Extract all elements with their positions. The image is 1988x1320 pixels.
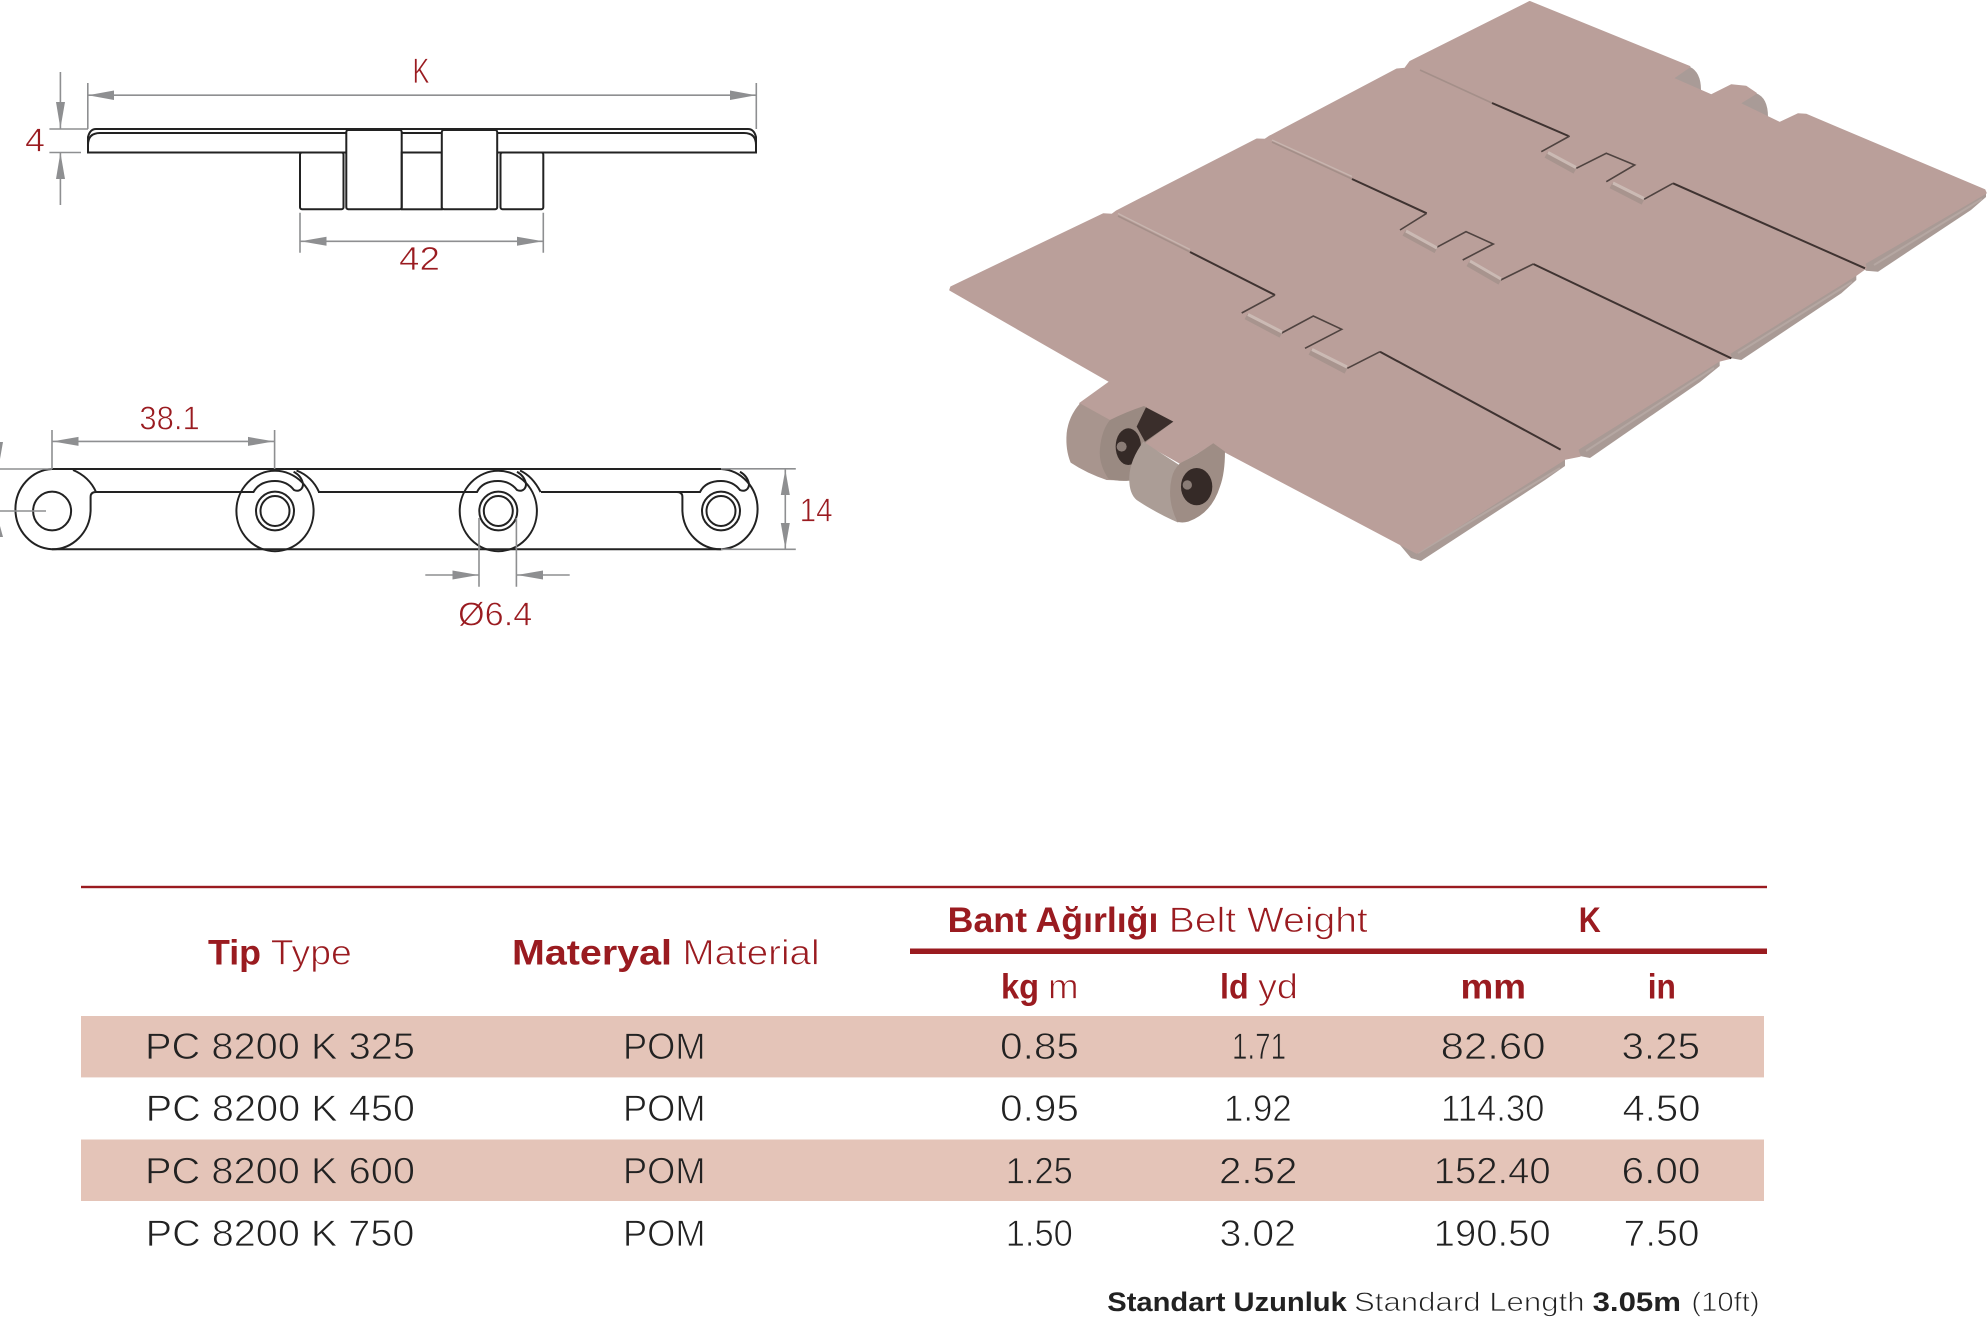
plate and lugs outline <box>88 129 756 209</box>
row: PC 8200 K 325: PC 8200 K 325 <box>145 1026 415 1067</box>
header: K: K <box>1579 901 1601 940</box>
right hinge knuckle <box>1129 442 1225 523</box>
photo: modular plastic chain plates rendered as shapes <box>950 2 1986 561</box>
link outlines <box>15 469 758 551</box>
footnote: standard length <box>1107 1287 1760 1317</box>
row: PC 8200 K 600 <box>81 1140 1764 1201</box>
pin holes <box>33 492 740 530</box>
rear hinge knuckles <box>1673 67 1780 124</box>
row: PC 8200 K 450: 1.92 <box>1224 1088 1292 1129</box>
footnote: standard length: Standard Length <box>1354 1287 1585 1317</box>
row: PC 8200 K 750: 3.02 <box>1220 1213 1296 1254</box>
dimension 14: 14 <box>800 491 833 528</box>
row: PC 8200 K 325 <box>81 1016 1764 1077</box>
row: PC 8200 K 750: 7.50 <box>1624 1213 1700 1254</box>
header: Materyal Material: Materyal <box>512 934 672 972</box>
dimension 42: 42 <box>399 240 440 277</box>
header: Bant Ağırlığı Belt Weight <box>948 901 1368 940</box>
subheader: in: in <box>1648 968 1676 1007</box>
header: Tip Type <box>208 934 352 972</box>
header: Materyal Material: Material <box>682 934 820 972</box>
dimension 14 <box>721 469 833 549</box>
row: PC 8200 K 750 <box>146 1213 1700 1254</box>
dimension K: K <box>412 52 430 91</box>
row: PC 8200 K 600: PC 8200 K 600 <box>145 1151 415 1192</box>
subheader: ld yd: ld <box>1220 968 1249 1007</box>
subheader: kg m: m <box>1048 968 1079 1007</box>
row: PC 8200 K 600: 6.00 <box>1622 1151 1700 1192</box>
header: Bant Ağırlığı Belt Weight: Bant Ağırlığı <box>948 901 1158 940</box>
row: PC 8200 K 750: 190.50 <box>1434 1213 1551 1254</box>
plate seams <box>1118 70 1865 450</box>
row: PC 8200 K 325: 1.71 <box>1232 1026 1286 1067</box>
row: PC 8200 K 600: POM <box>623 1151 706 1192</box>
footnote: standard length: (10ft) <box>1691 1287 1760 1317</box>
front bevel edges of plates <box>1400 190 1986 561</box>
subheader: mm: mm <box>1460 968 1526 1007</box>
row: PC 8200 K 325: 0.85 <box>1000 1026 1079 1067</box>
dimension diameter 6.4 <box>425 518 570 632</box>
row: PC 8200 K 325: 3.25 <box>1622 1026 1700 1067</box>
row: PC 8200 K 450: PC 8200 K 450 <box>146 1088 415 1129</box>
dimension K <box>88 52 756 129</box>
row: PC 8200 K 600: 1.25 <box>1006 1151 1073 1192</box>
row: PC 8200 K 450: POM <box>623 1088 706 1129</box>
header: Materyal Material <box>512 934 820 972</box>
table: belt specifications <box>81 886 1767 1254</box>
subheader: ld yd <box>1220 968 1298 1007</box>
row: PC 8200 K 750: 1.50 <box>1006 1213 1073 1254</box>
subheader: ld yd: yd <box>1258 968 1298 1007</box>
row: PC 8200 K 325: POM <box>623 1026 706 1067</box>
row: PC 8200 K 600: 152.40 <box>1434 1151 1551 1192</box>
dimension 42 <box>300 213 543 277</box>
header: Bant Ağırlığı Belt Weight: Belt Weight <box>1169 901 1368 940</box>
footnote: standard length: 3.05m <box>1593 1287 1681 1317</box>
dimension 4 <box>25 72 88 205</box>
header: Tip Type: Tip <box>208 934 261 972</box>
header: Tip Type: Type <box>271 934 352 972</box>
drawing: top view of belt link with dimensions <box>25 52 756 277</box>
row: PC 8200 K 450: 114.30 <box>1441 1088 1544 1129</box>
cropped dimension marks at left edge <box>0 442 52 537</box>
row: PC 8200 K 450: 0.95 <box>1000 1088 1079 1129</box>
drawing: side view of chain links with dimensions <box>0 400 833 632</box>
plate top surfaces <box>950 2 1986 553</box>
header rule under weight and K <box>910 948 1767 954</box>
subheader: kg m <box>1001 968 1079 1007</box>
table top rule <box>81 886 1767 888</box>
row: PC 8200 K 325: 82.60 <box>1441 1026 1546 1067</box>
left hinge knuckle <box>1066 403 1173 481</box>
bevel shading <box>1418 199 1982 553</box>
row: PC 8200 K 450: 4.50 <box>1622 1088 1700 1129</box>
dimension 38.1 <box>52 400 275 469</box>
dimension 4: 4 <box>25 122 45 159</box>
dimension 38.1: 38.1 <box>139 400 200 437</box>
row: PC 8200 K 600: 2.52 <box>1219 1151 1297 1192</box>
row: PC 8200 K 750: PC 8200 K 750 <box>146 1213 414 1254</box>
footnote: standard length: Standart Uzunluk <box>1107 1287 1348 1317</box>
row: PC 8200 K 750: POM <box>623 1213 706 1254</box>
row: PC 8200 K 450 <box>146 1088 1701 1129</box>
dimension diameter 6.4: Ø6.4 <box>458 596 532 632</box>
subheader: kg m: kg <box>1001 968 1039 1007</box>
